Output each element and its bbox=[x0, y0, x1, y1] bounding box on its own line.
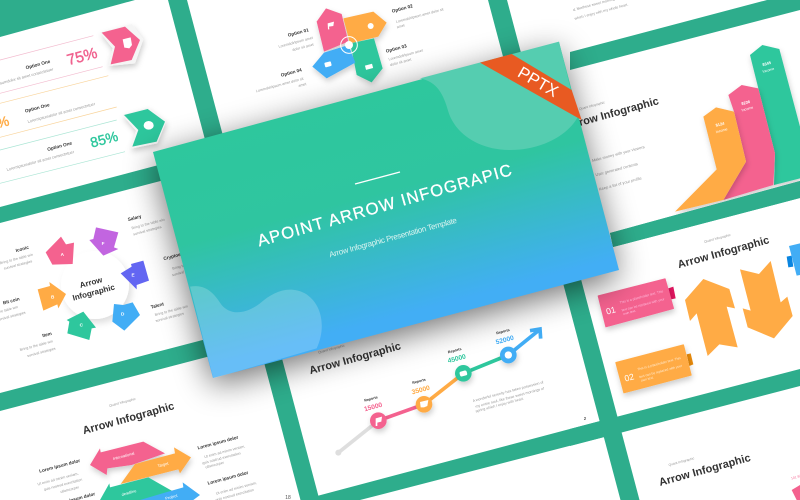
option labels: Option 03 bbox=[385, 43, 408, 54]
hero subtitle: Arrow Infographic Presentation Template bbox=[328, 216, 458, 259]
arrow labels: Income bbox=[762, 67, 775, 74]
option labels: Option 01 bbox=[287, 27, 310, 38]
chart description: A wonderful serenity has taken possession of bbox=[472, 380, 545, 403]
orange card: 02 bbox=[623, 371, 635, 384]
slide: circular arrows bbox=[0, 214, 191, 358]
chart values: 45000 bbox=[447, 353, 467, 365]
arrow captions: Bring to the bbox=[172, 262, 191, 271]
bottom left blob bbox=[190, 286, 322, 378]
right captions: ullamcorper bbox=[205, 460, 225, 469]
option labels: Loremdolrlpsum amet dolor sit bbox=[395, 7, 444, 24]
left captions: ullamcorper bbox=[60, 485, 80, 494]
slide title: Arrow Infographic bbox=[308, 340, 402, 377]
pink card: own text. bbox=[623, 309, 637, 316]
option labels: dolor sit amet bbox=[292, 43, 314, 52]
chart description: spring which I enjoy with heart. bbox=[475, 397, 524, 413]
right captions: Lorem ipsum dolor bbox=[197, 435, 239, 450]
arrow E bbox=[121, 261, 149, 289]
pink card bbox=[598, 279, 676, 327]
pink card: 01 bbox=[605, 304, 617, 317]
teal tag bbox=[122, 107, 166, 149]
lower slide title: Arrow Infographic bbox=[658, 452, 752, 489]
option labels: Option 02 bbox=[391, 3, 414, 14]
right captions: Ut enim ad minim veniam, bbox=[215, 481, 257, 496]
slide: cards and arrows bbox=[584, 233, 800, 500]
option text: 75% bbox=[65, 45, 100, 69]
option labels: Option 04 bbox=[280, 67, 303, 78]
slide: four-way arrows bbox=[255, 3, 444, 93]
lower slide pink shape bbox=[792, 485, 800, 500]
slide kicker: Quand Infographic bbox=[109, 397, 136, 408]
option text: 85% bbox=[88, 128, 120, 151]
orange arrow bbox=[675, 107, 746, 212]
arrow letters: E bbox=[131, 273, 135, 278]
arrow labels: Income bbox=[741, 106, 754, 113]
arrow captions: survival strategies bbox=[133, 225, 162, 236]
bullet list: Make money with your viewers bbox=[591, 144, 645, 163]
left captions: Ut enim ad minim veniam, bbox=[37, 472, 79, 486]
arrow labels: $345 bbox=[762, 60, 772, 67]
option text: Option One bbox=[24, 102, 51, 114]
arrow captions bbox=[0, 214, 191, 358]
blue card edge bbox=[787, 243, 800, 276]
teal arrow bbox=[350, 38, 383, 82]
arrow letters: F bbox=[102, 241, 105, 246]
slide: double arrows bbox=[37, 397, 257, 500]
option text: Loremipsumdolor sit amet consectetuer bbox=[6, 149, 75, 172]
arrow letters: D bbox=[121, 312, 125, 317]
arrow letters: B bbox=[51, 294, 55, 299]
orange arrow bbox=[343, 12, 387, 43]
pink card: text can be replaced with your bbox=[621, 297, 666, 312]
bullet list bbox=[591, 144, 645, 192]
right captions: Ut enim ad minim veniam, bbox=[204, 444, 246, 459]
option labels bbox=[255, 3, 444, 93]
slide top text: which I enjoy with my whole heart. bbox=[574, 3, 629, 21]
chart line bbox=[335, 329, 541, 456]
arrow labels bbox=[715, 60, 775, 134]
hero title: APOINT ARROW INFOGRAPIC bbox=[255, 160, 514, 250]
chart nodes bbox=[370, 347, 517, 429]
hero slide bbox=[153, 42, 619, 378]
chart description bbox=[472, 380, 545, 413]
option labels: amet bbox=[298, 82, 307, 88]
pink arrow bbox=[723, 85, 775, 200]
slide: stepped arrows bbox=[566, 0, 800, 212]
slide title: Arrow Infographic bbox=[566, 95, 660, 132]
pink arrow: International bbox=[112, 451, 135, 461]
up arrow bbox=[685, 279, 738, 356]
option lines bbox=[0, 36, 125, 183]
hero shadow bbox=[153, 50, 619, 386]
option labels: amet bbox=[396, 23, 405, 29]
page number: 2 bbox=[584, 416, 587, 421]
center dial bbox=[341, 37, 357, 53]
orange card: own text. bbox=[640, 375, 654, 383]
bullet list: User generated contents bbox=[595, 161, 638, 177]
option labels: Loremdolrlpsum amet bbox=[278, 36, 313, 49]
lower slide kicker: Quant Infographic bbox=[668, 456, 695, 467]
right captions bbox=[197, 435, 257, 500]
left captions: Lorem ipsum dolor bbox=[39, 458, 81, 474]
chart values: Reports bbox=[448, 347, 462, 354]
teal arrow bbox=[750, 45, 800, 185]
blue arrow bbox=[140, 482, 200, 500]
arrow captions: Bring to the table win bbox=[19, 339, 53, 352]
arrow captions: Iconic bbox=[15, 245, 30, 253]
option labels: Loremdolrlpsum amet dolor sit bbox=[255, 77, 304, 93]
right captions: Lorem ipsum dolor bbox=[207, 470, 249, 486]
arrow labels: Income bbox=[715, 127, 728, 134]
left captions: quis nostrud exercitation bbox=[43, 478, 83, 492]
arrow letters: A bbox=[61, 252, 65, 257]
option text: Option One bbox=[47, 140, 73, 152]
arrow C bbox=[67, 312, 96, 340]
option labels: dolor sit amet bbox=[390, 58, 412, 67]
ribbon: PPTX bbox=[514, 63, 562, 101]
arrow A bbox=[46, 237, 74, 265]
slide kicker: Quand Infographic bbox=[704, 233, 731, 244]
arrow labels: $236 bbox=[741, 99, 751, 106]
arrow D bbox=[112, 302, 140, 331]
slide: percentage options bbox=[0, 24, 166, 183]
arrow captions: survival strategies bbox=[3, 259, 33, 271]
bullet list: Keep a list of your profile bbox=[598, 175, 643, 192]
title rule bbox=[355, 172, 400, 184]
page number: 2 bbox=[584, 416, 587, 421]
chart values bbox=[363, 328, 515, 413]
ribbon bbox=[480, 54, 582, 120]
hero background bbox=[153, 42, 619, 378]
blue arrow bbox=[312, 45, 355, 78]
slide title: Arrow Infographic bbox=[81, 400, 176, 437]
arrow captions: Salary bbox=[127, 214, 142, 222]
center title: Arrow bbox=[79, 275, 104, 290]
orange arrow: Target bbox=[157, 460, 170, 468]
teal arrow: deadline bbox=[121, 488, 138, 497]
node icons bbox=[376, 351, 512, 426]
arrow captions: Bring to the table win bbox=[0, 253, 33, 265]
arrow letters bbox=[51, 241, 135, 327]
orange card: text can be replaced with your bbox=[639, 363, 683, 379]
option text: Loremipsumdolor sit amet consectetuer bbox=[27, 101, 96, 124]
arrow captions: survival bbox=[172, 270, 185, 277]
chart values: Reports bbox=[364, 395, 378, 403]
chart values: 52000 bbox=[495, 335, 515, 346]
arrow captions: Talent bbox=[150, 301, 165, 310]
teal arrow bbox=[100, 477, 173, 500]
down arrow bbox=[740, 261, 793, 338]
slide: line chart bbox=[308, 328, 587, 456]
chart values: 15000 bbox=[363, 402, 383, 413]
slide kicker: Quant Infographic bbox=[579, 100, 606, 111]
arrow captions: Bit coin bbox=[2, 296, 20, 306]
arrow captions: survival strategies bbox=[27, 347, 56, 358]
chart values: Reports bbox=[412, 378, 426, 385]
orange arrow bbox=[121, 447, 191, 484]
slide kicker: Quand Infographic bbox=[318, 343, 345, 355]
center title: Infographic bbox=[72, 282, 116, 303]
re-draw bar over arrows bbox=[610, 181, 800, 247]
option text: Option One bbox=[25, 59, 51, 70]
arrow B bbox=[38, 282, 66, 311]
orange card bbox=[616, 345, 693, 393]
option labels: Loremdolrlpsum amet bbox=[388, 49, 423, 62]
chart values: Reports bbox=[496, 328, 510, 335]
pink arrow bbox=[90, 442, 165, 475]
slide title: Arrow Infographic bbox=[676, 234, 771, 271]
center circle bbox=[61, 251, 129, 319]
arrow labels: $124 bbox=[715, 120, 726, 128]
option text bbox=[0, 45, 120, 172]
pink arrow bbox=[317, 8, 348, 52]
left captions bbox=[37, 458, 96, 500]
arrow F bbox=[89, 227, 118, 256]
pink tag bbox=[100, 24, 143, 66]
chart values: 35000 bbox=[411, 385, 431, 396]
right captions: quis nostrud exercitation bbox=[202, 451, 241, 465]
arrow captions: survival strategies bbox=[155, 312, 185, 323]
arrow cluster bbox=[312, 8, 387, 82]
arrow captions: Bring to the table win bbox=[154, 304, 188, 317]
arrow letters: C bbox=[80, 322, 84, 327]
arrow captions: Item bbox=[42, 331, 52, 338]
arrow captions: Cryptoe bbox=[163, 252, 181, 261]
orange card: This is a placeholder text. This bbox=[637, 356, 682, 371]
pink card: This is a placeholder text. This bbox=[619, 289, 664, 305]
top right blob bbox=[420, 42, 578, 150]
chart description: my entire soul, like these sweet mornings of bbox=[475, 386, 545, 409]
arrow icons bbox=[324, 22, 374, 70]
arrow captions: Bring to the table win bbox=[131, 218, 165, 230]
